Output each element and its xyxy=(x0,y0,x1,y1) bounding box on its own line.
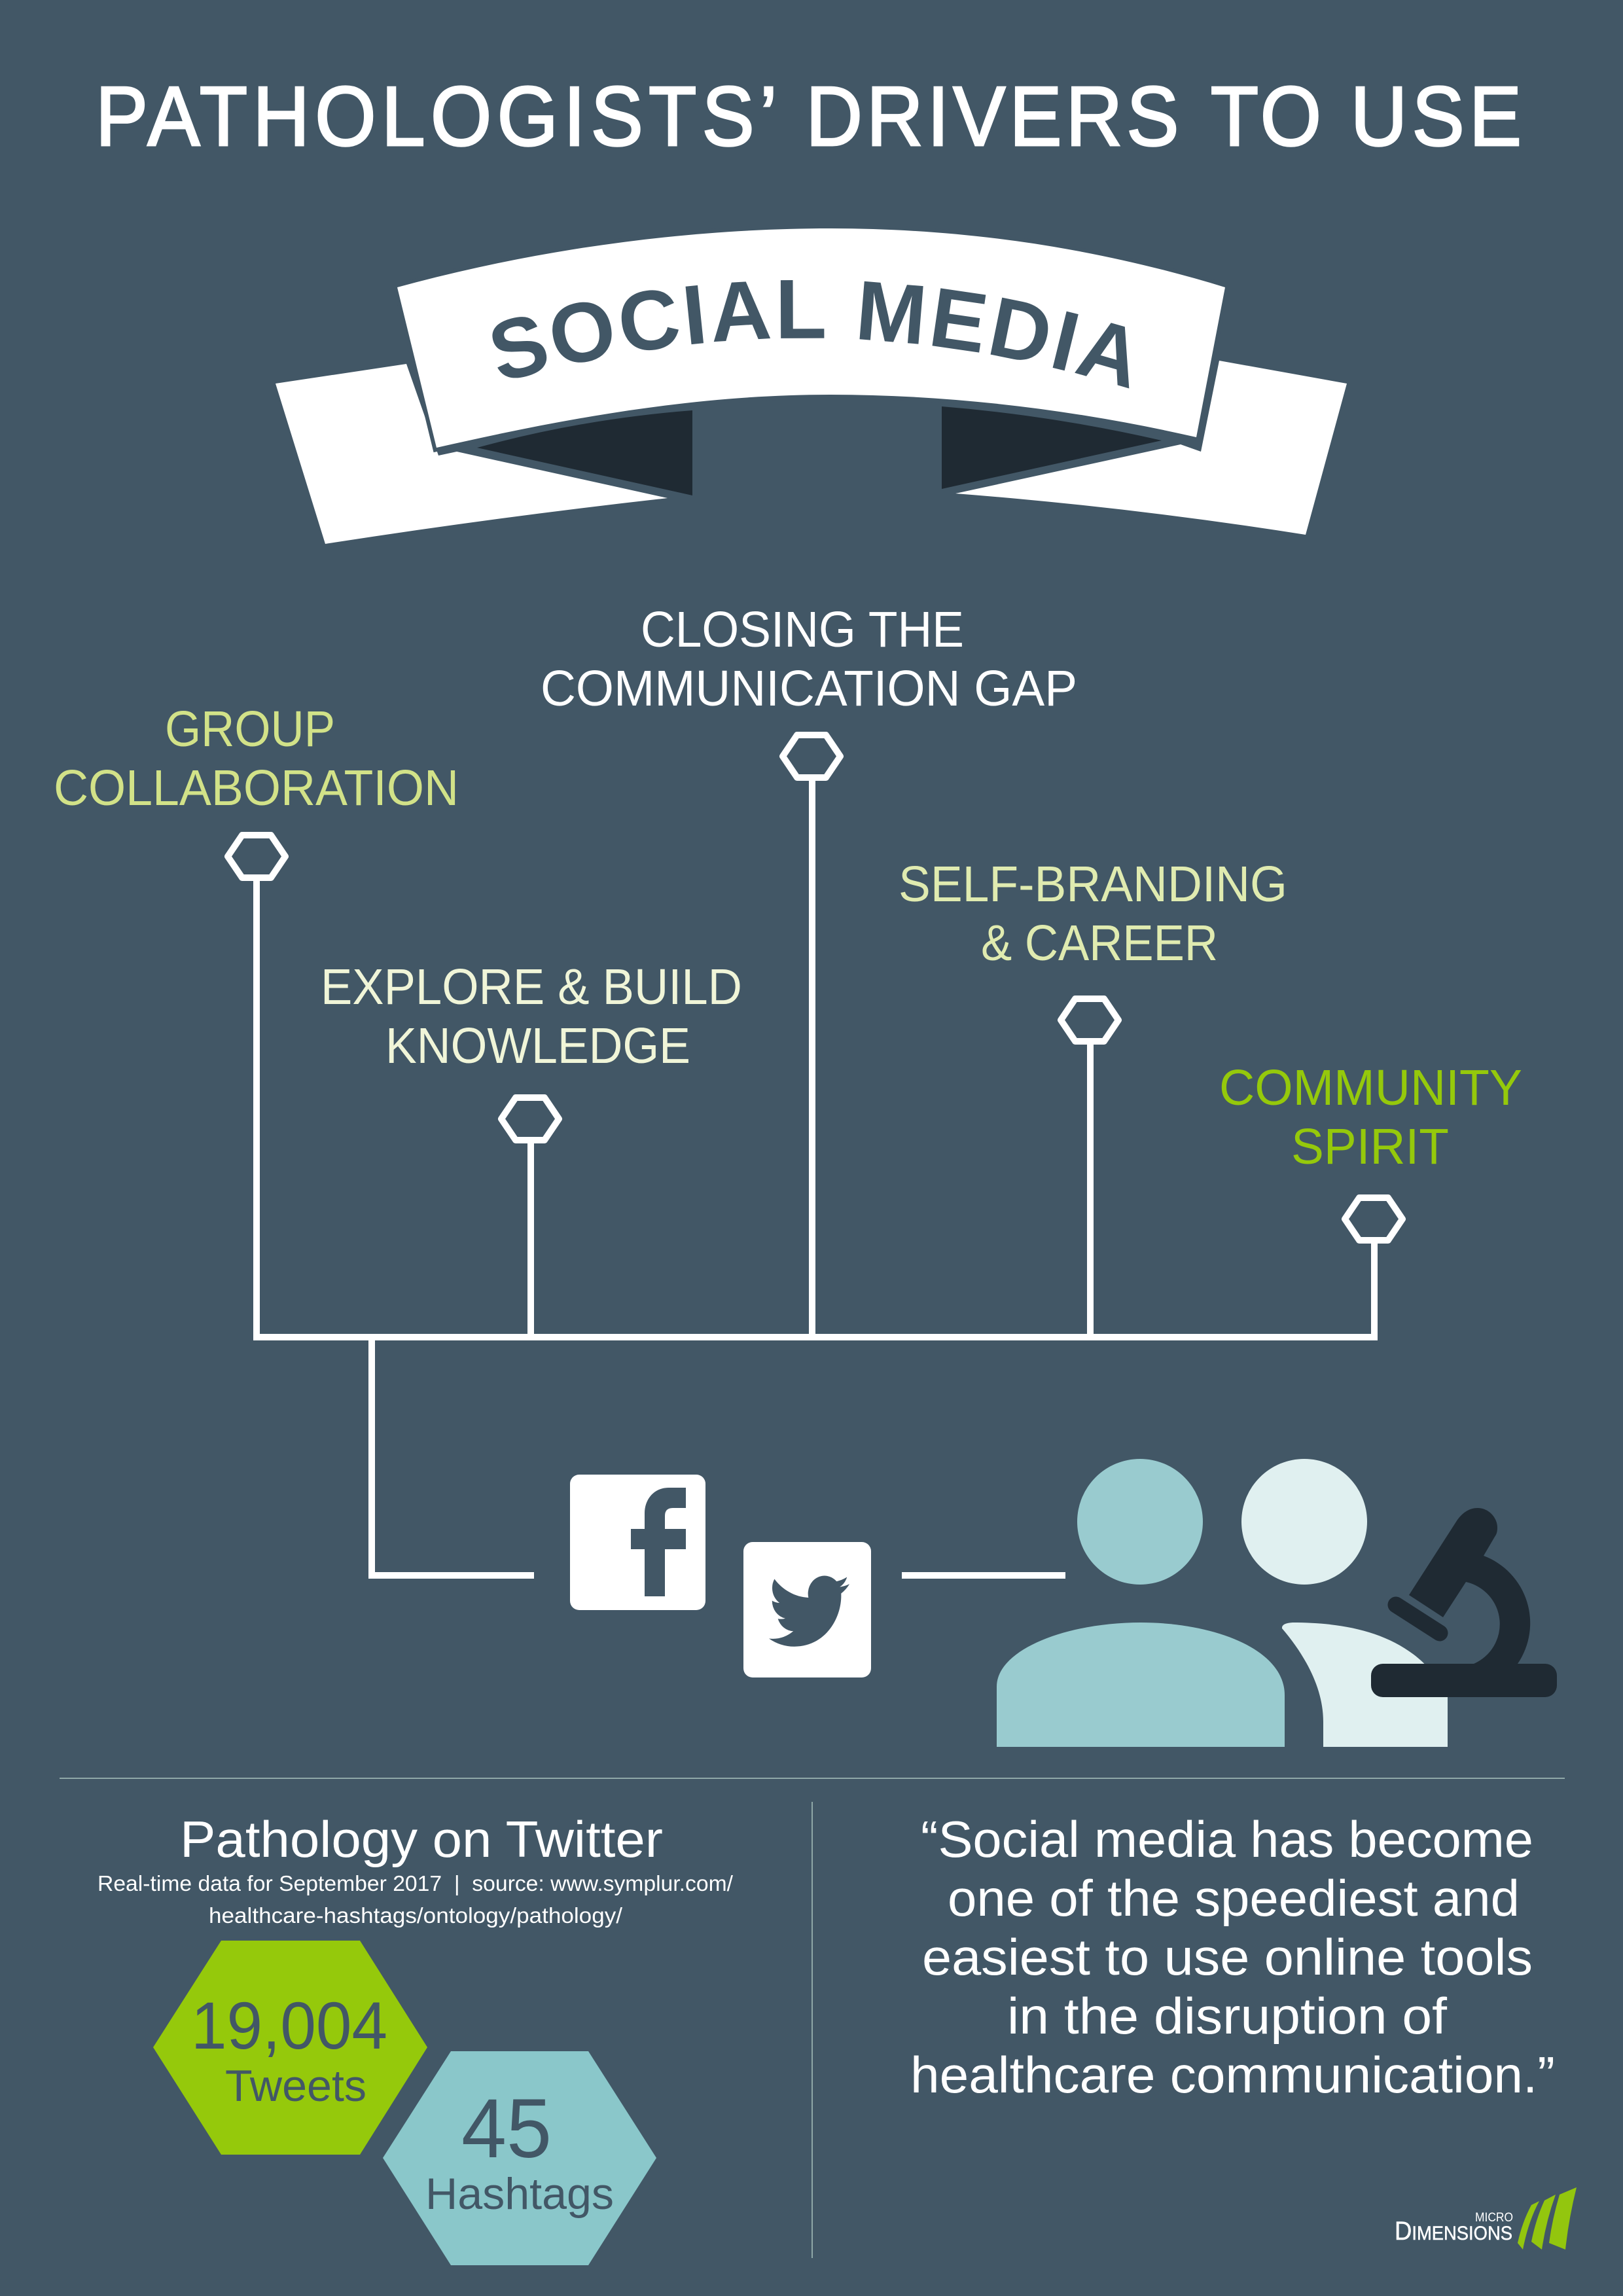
heading: pathology on twitter: Pathology on Twitter xyxy=(180,1810,663,1868)
label: group collaboration: COLLABORATION xyxy=(54,760,459,816)
icon: microscope xyxy=(1371,1508,1557,1697)
hexagon node: self-branding and career xyxy=(1061,999,1118,1041)
banner left tail xyxy=(276,364,668,544)
quote: “Social media has become xyxy=(921,1810,1533,1868)
stat hexagon: tweets: 19,004 xyxy=(191,1988,387,2063)
stat hexagon: hashtags xyxy=(383,2051,656,2265)
icon: person one xyxy=(997,1459,1285,1747)
banner: social media xyxy=(276,228,1347,544)
quote xyxy=(910,1810,1555,2104)
label: community spirit xyxy=(1219,1060,1522,1175)
label: explore and build knowledge xyxy=(321,959,742,1074)
banner main band xyxy=(397,228,1225,448)
source note: healthcare-hashtags/ontology/pathology/ xyxy=(209,1903,623,1928)
quote: one of the speediest and xyxy=(948,1869,1520,1927)
source note: Real-time data for September 2017 | source: www.symplur.com/ xyxy=(98,1871,734,1895)
icon: facebook xyxy=(570,1475,705,1610)
logo: micro dimensions: MICRO xyxy=(1475,2211,1513,2225)
label: group collaboration: GROUP xyxy=(165,701,335,757)
label: community spirit: COMMUNITY xyxy=(1219,1060,1522,1116)
icon: twitter xyxy=(743,1542,871,1677)
label: closing the communication gap: COMMUNICATION GAP xyxy=(541,660,1077,717)
label: explore and build knowledge: KNOWLEDGE xyxy=(385,1018,690,1074)
quote: in the disruption of xyxy=(1007,1987,1447,2045)
label: closing the communication gap xyxy=(541,601,1077,717)
banner right tail xyxy=(955,361,1347,535)
title: USE xyxy=(1351,69,1522,164)
label: self-branding and career: & CAREER xyxy=(981,915,1218,971)
stat hexagon: tweets xyxy=(153,1941,427,2155)
hexagon node: closing the communication gap xyxy=(783,735,840,778)
banner left fold xyxy=(477,410,692,495)
source note xyxy=(98,1871,734,1928)
title: DRIVERS xyxy=(806,69,1179,164)
hexagon node: group collaboration xyxy=(228,835,285,878)
stat hexagon: hashtags: 45 xyxy=(461,2082,552,2176)
banner heading: SOCIAL MEDIA xyxy=(492,280,1130,389)
icon: person two xyxy=(1241,1459,1448,1747)
hexagon node: explore and build knowledge xyxy=(501,1098,559,1140)
stat hexagon: tweets: Tweets xyxy=(225,2061,366,2111)
label: explore and build knowledge: EXPLORE & BUILD xyxy=(321,959,742,1015)
label: self-branding and career xyxy=(899,856,1287,971)
logo: micro dimensions: DIMENSIONS xyxy=(1395,2217,1512,2246)
stat hexagon: hashtags: Hashtags xyxy=(425,2169,614,2219)
label: self-branding and career: SELF-BRANDING xyxy=(899,856,1287,912)
label: community spirit: SPIRIT xyxy=(1291,1119,1449,1175)
tree connector lines xyxy=(257,781,1374,1575)
divider: horizontal xyxy=(60,1778,1565,1779)
quote: easiest to use online tools xyxy=(922,1928,1533,1986)
hexagon node: community spirit xyxy=(1345,1198,1402,1240)
label: group collaboration xyxy=(54,701,459,816)
title xyxy=(96,69,1522,164)
logo: micro dimensions xyxy=(1395,2187,1577,2250)
label: closing the communication gap: CLOSING THE xyxy=(641,601,964,658)
banner right fold xyxy=(942,406,1162,489)
title: PATHOLOGISTS’ xyxy=(96,69,777,164)
title: TO xyxy=(1211,69,1321,164)
divider: vertical xyxy=(812,1802,813,2258)
quote: healthcare communication.” xyxy=(910,2046,1555,2104)
